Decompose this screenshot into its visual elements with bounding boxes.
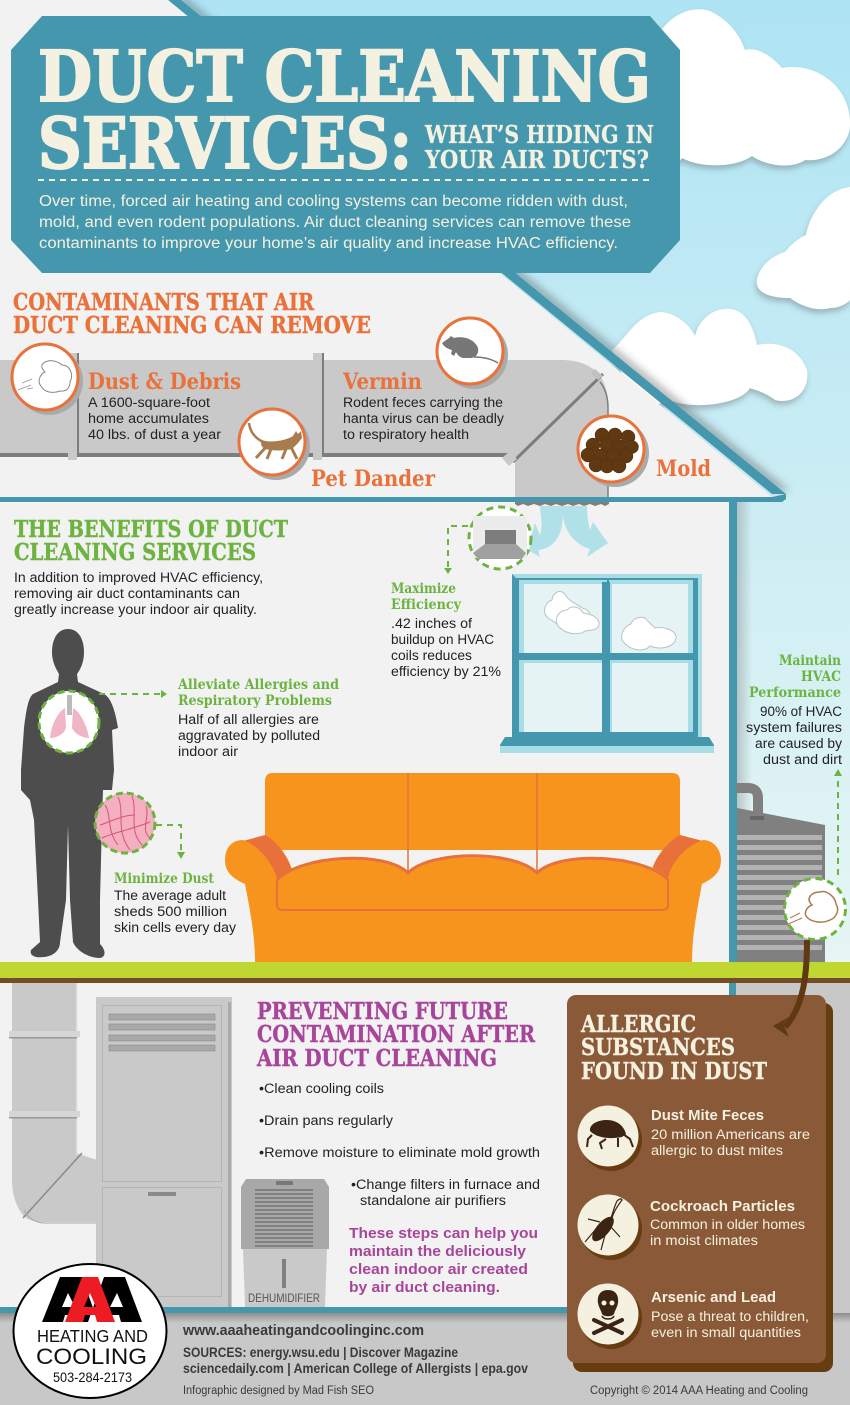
maximize efficiency text: buildup on HVAC bbox=[391, 632, 494, 647]
arsenic item: Pose a threat to children, bbox=[651, 1309, 809, 1324]
maximize efficiency text: Efficiency bbox=[391, 597, 462, 613]
cockroach item: Cockroach Particles bbox=[650, 1199, 795, 1215]
benefits intro text: In addition to improved HVAC efficiency, bbox=[14, 570, 263, 585]
maximize efficiency text: coils reduces bbox=[391, 648, 472, 663]
heading: contaminants: DUCT CLEANING CAN REMOVE bbox=[13, 312, 371, 339]
purple closing text: maintain the deliciously bbox=[349, 1243, 527, 1260]
intro paragraph bbox=[39, 193, 631, 252]
panel: title banner bbox=[11, 16, 680, 273]
dehumidifier: DEHUMIDIFIER bbox=[248, 1291, 320, 1305]
minimize dust text: The average adult bbox=[114, 888, 226, 903]
alleviate allergies text: Respiratory Problems bbox=[178, 693, 332, 709]
sky background bbox=[0, 0, 850, 985]
ground grass bbox=[0, 962, 850, 978]
dust mite item: Dust Mite Feces bbox=[651, 1108, 764, 1124]
purple closing text: clean indoor air created bbox=[349, 1261, 528, 1278]
maximize efficiency text: efficiency by 21% bbox=[391, 664, 501, 679]
logo: 503-284-2173 bbox=[53, 1370, 132, 1385]
pet dander block: Pet Dander bbox=[311, 466, 435, 492]
icon: rat bbox=[437, 318, 508, 389]
purple closing text: by air duct cleaning. bbox=[349, 1279, 500, 1296]
footer text: sciencedaily.com | American College of Allergists | epa.gov bbox=[183, 1361, 528, 1376]
arrow: dust to allergen panel bbox=[773, 940, 807, 1037]
basement wall bbox=[0, 983, 850, 1313]
pet dander block bbox=[239, 409, 435, 492]
allergic heading: SUBSTANCES bbox=[581, 1034, 735, 1061]
icon: lungs bbox=[39, 691, 99, 753]
arsenic item bbox=[578, 1284, 809, 1349]
ground soil line bbox=[0, 978, 850, 983]
prevention bullet list: •Clean cooling coils bbox=[259, 1081, 384, 1096]
footer text: Copyright © 2014 AAA Heating and Cooling bbox=[590, 1385, 808, 1397]
alleviate allergies text: Alleviate Allergies and bbox=[177, 677, 339, 693]
purple closing text: These steps can help you bbox=[349, 1225, 538, 1242]
heading: preventing bbox=[256, 998, 536, 1072]
logo bbox=[14, 1264, 166, 1398]
sofa bbox=[225, 773, 721, 962]
duct in attic bbox=[0, 353, 609, 506]
maintain hvac text: 90% of HVAC bbox=[760, 704, 842, 719]
footer text bbox=[182, 1322, 808, 1397]
allergic heading: FOUND IN DUST bbox=[581, 1058, 767, 1085]
vermin block bbox=[342, 318, 508, 442]
benefits intro text bbox=[14, 570, 263, 617]
maintain hvac text bbox=[746, 653, 842, 767]
minimize dust text bbox=[114, 825, 236, 935]
minimize dust text: Minimize Dust bbox=[114, 871, 214, 887]
icon: green dashed dust circle bbox=[784, 769, 846, 940]
footer band bbox=[0, 1307, 850, 1405]
icon: skull and crossbones bbox=[578, 1284, 642, 1349]
icon: skin cells bbox=[95, 793, 155, 853]
alleviate allergies text: Half of all allergies are bbox=[178, 712, 319, 727]
clouds in the sky bbox=[612, 9, 850, 405]
basement duct bbox=[9, 983, 97, 1223]
logo: HEATING AND bbox=[37, 1326, 148, 1346]
alleviate allergies text: aggravated by polluted bbox=[178, 728, 320, 743]
maintain hvac text: are caused by bbox=[755, 736, 842, 751]
logo: COOLING bbox=[36, 1344, 147, 1369]
icon: cat bbox=[239, 409, 310, 480]
furnace bbox=[96, 997, 232, 1307]
dust mite item: 20 million Americans are bbox=[651, 1127, 810, 1142]
minimize dust text: skin cells every day bbox=[114, 920, 236, 935]
footer text: www.aaaheatingandcoolinginc.com bbox=[182, 1322, 424, 1339]
dust mite item bbox=[578, 1106, 810, 1171]
heading: benefits bbox=[14, 516, 288, 566]
title: SERVICES: bbox=[38, 102, 412, 185]
heading: preventing: CONTAMINATION AFTER bbox=[257, 1021, 536, 1048]
mold block: Mold bbox=[656, 456, 711, 482]
house wall right side bbox=[729, 497, 752, 963]
heading: contaminants: CONTAMINANTS THAT AIR bbox=[13, 289, 315, 316]
prevention bullet list: •Drain pans regularly bbox=[259, 1113, 393, 1128]
vermin block: to respiratory health bbox=[343, 427, 469, 442]
icon: mold spores bbox=[578, 416, 649, 487]
prevention bullet list: •Change filters in furnace and bbox=[351, 1177, 540, 1192]
heading: contaminants bbox=[13, 289, 371, 339]
dust and debris block: 40 lbs. of dust a year bbox=[88, 427, 222, 442]
dehumidifier bbox=[241, 1179, 329, 1307]
footer text: SOURCES: energy.wsu.edu | Discover Magazine bbox=[183, 1345, 458, 1360]
maintain hvac text: HVAC bbox=[801, 669, 841, 685]
icon: cockroach bbox=[578, 1194, 642, 1260]
icon: air vent bbox=[469, 507, 531, 569]
intro paragraph: contaminants to improve your home’s air quality and increase HVAC efficiency. bbox=[39, 235, 618, 252]
prevention bullet list: standalone air purifiers bbox=[360, 1193, 506, 1208]
title: YOUR AIR DUCTS? bbox=[424, 145, 649, 174]
cockroach item: in moist climates bbox=[650, 1233, 758, 1248]
heading: preventing: PREVENTING FUTURE bbox=[257, 998, 508, 1025]
maximize efficiency text: .42 inches of bbox=[391, 616, 472, 631]
vermin block: Rodent feces carrying the bbox=[343, 395, 503, 410]
maximize efficiency text: Maximize bbox=[391, 581, 456, 597]
maximize efficiency text bbox=[391, 526, 501, 679]
intro paragraph: Over time, forced air heating and cooling systems can become ridden with dust, bbox=[39, 193, 628, 210]
house interior wall and attic bbox=[0, 0, 772, 985]
heading: preventing: AIR DUCT CLEANING bbox=[256, 1045, 497, 1072]
benefits intro text: removing air duct contaminants can bbox=[14, 586, 240, 601]
dust and debris block: home accumulates bbox=[88, 411, 209, 426]
footer text: Infographic designed by Mad Fish SEO bbox=[183, 1385, 374, 1397]
cockroach item: Common in older homes bbox=[650, 1217, 805, 1232]
outdoor ac unit bbox=[736, 788, 825, 962]
heading: benefits: THE BENEFITS OF DUCT bbox=[14, 516, 288, 543]
prevention bullet list: •Remove moisture to eliminate mold growth bbox=[259, 1145, 540, 1160]
maintain hvac text: dust and dirt bbox=[763, 752, 842, 767]
alleviate allergies text: indoor air bbox=[178, 744, 239, 759]
intro paragraph: mold, and even rodent populations. Air duct cleaning services can remove these bbox=[39, 214, 631, 231]
title bbox=[38, 35, 654, 185]
mold block bbox=[578, 416, 711, 487]
dust mite item: allergic to dust mites bbox=[651, 1143, 783, 1158]
dust and debris block: Dust & Debris bbox=[88, 369, 241, 395]
prevention bullet list bbox=[259, 1081, 540, 1208]
window bbox=[500, 574, 714, 753]
air flow arrows bbox=[528, 506, 608, 557]
allergic heading bbox=[580, 1011, 767, 1085]
arsenic item: even in small quantities bbox=[651, 1325, 801, 1340]
title: DUCT CLEANING bbox=[38, 35, 651, 118]
purple closing text bbox=[349, 1225, 538, 1296]
panel: allergic substances bbox=[567, 995, 833, 1372]
benefits intro text: greatly increase your indoor air quality. bbox=[14, 602, 257, 617]
vermin block: hanta virus can be deadly bbox=[343, 411, 504, 426]
title: WHAT’S HIDING IN bbox=[424, 120, 654, 149]
roof line bbox=[168, 0, 786, 494]
dust and debris block: A 1600-square-foot bbox=[88, 395, 210, 410]
allergic heading: ALLERGIC bbox=[580, 1011, 696, 1038]
dust and debris block bbox=[12, 344, 241, 442]
icon: dust cloud bbox=[12, 344, 83, 415]
minimize dust text: sheds 500 million bbox=[114, 904, 227, 919]
maintain hvac text: system failures bbox=[746, 720, 842, 735]
maintain hvac text: Maintain bbox=[779, 653, 841, 669]
maintain hvac text: Performance bbox=[749, 685, 841, 701]
window clouds bbox=[545, 592, 676, 650]
icon: dust mite bbox=[578, 1106, 642, 1171]
ceiling band bbox=[0, 494, 786, 502]
alleviate allergies text bbox=[99, 677, 339, 759]
arsenic item: Arsenic and Lead bbox=[651, 1290, 776, 1306]
person silhouette bbox=[21, 629, 118, 958]
heading: benefits: CLEANING SERVICES bbox=[14, 539, 256, 566]
cockroach item bbox=[578, 1194, 805, 1260]
vermin block: Vermin bbox=[342, 369, 422, 395]
